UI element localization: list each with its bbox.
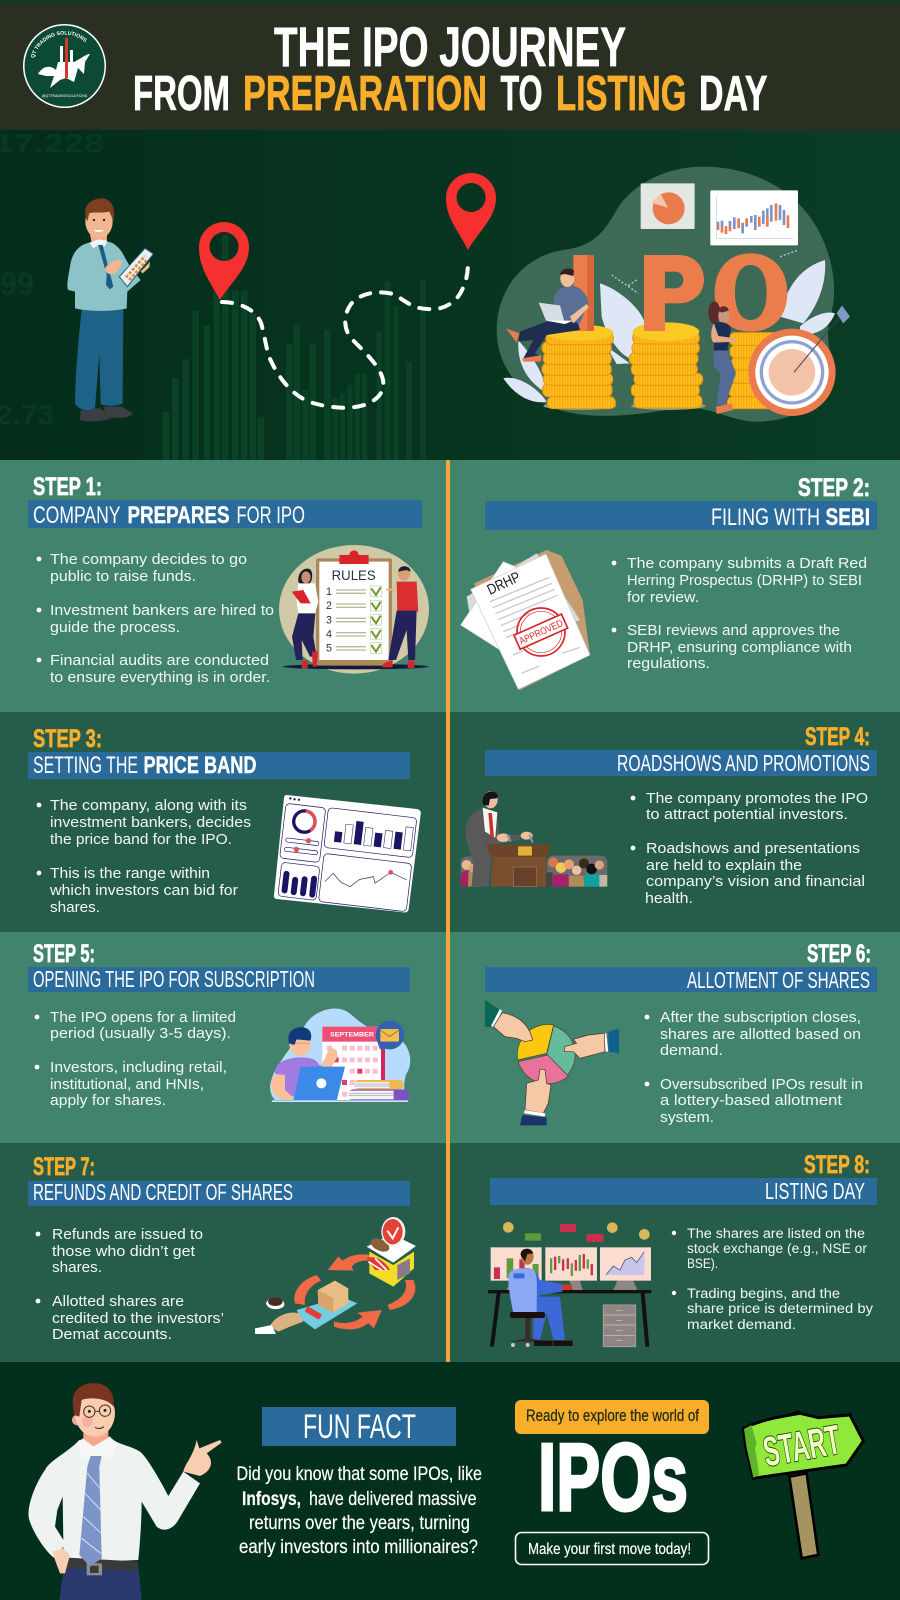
bullet list: company’s vision and financial: [646, 874, 865, 890]
fun fact text: Did you know that some IPOs, like: [236, 1463, 482, 1485]
books: [348, 1080, 409, 1101]
bullet list: demand.: [660, 1043, 723, 1059]
bullet list: [631, 791, 868, 907]
woman: [298, 569, 312, 585]
heading bar: PRICE BAND: [144, 752, 256, 779]
faint background numbers: 99: [0, 266, 34, 302]
icon: hands holding pie chart: [485, 1000, 619, 1125]
bullet list: DRHP, ensuring compliance with: [627, 640, 852, 656]
icon: location pin 2: [446, 173, 496, 250]
person standing: [708, 301, 737, 414]
bullet list: for review.: [627, 590, 699, 606]
illustration: IPO coins and target: [497, 167, 850, 422]
bullet list: market demand.: [687, 1317, 796, 1332]
panel: step 3: [0, 712, 448, 932]
heading bar: FOR IPO: [236, 502, 305, 529]
person with laptop: [506, 269, 589, 362]
icon: rules clipboard: 1: [326, 586, 332, 598]
bullet list: Roadshows and presentations: [646, 841, 860, 857]
bullet list: The company decides to go: [50, 552, 247, 568]
bullet list: apply for shares.: [50, 1093, 166, 1109]
leaves: [503, 260, 835, 402]
bullet list: institutional, and HNIs,: [50, 1077, 204, 1093]
bullet list: Refunds are issued to: [52, 1227, 203, 1243]
bullet list: regulations.: [627, 656, 710, 672]
icon: rules clipboard: 3: [326, 614, 332, 626]
heading bar: PREPARES: [128, 502, 230, 529]
icon: rules clipboard: [279, 545, 429, 674]
title: FROM: [133, 67, 230, 121]
bullet list: This is the range within: [50, 866, 210, 882]
heading bar: [490, 1178, 877, 1205]
bullet list: guide the process.: [50, 620, 180, 636]
illustration: man pointing: [29, 1383, 222, 1600]
bullet list: After the subscription closes,: [660, 1010, 861, 1026]
callout: first move: [516, 1532, 708, 1564]
man: [398, 566, 410, 581]
panel: step 7: [0, 1143, 448, 1362]
fun fact text: returns over the years, turning: [249, 1512, 470, 1534]
heading bar: COMPANY: [33, 502, 120, 529]
bullet list: Investment bankers are hired to: [50, 603, 274, 619]
callout: first move: Make your first move today!: [528, 1541, 691, 1558]
bullet list: shares are allotted based on: [660, 1027, 861, 1043]
step label: STEP 3:: [33, 725, 102, 753]
hero illustration panel: [0, 128, 900, 463]
icon: speaker at podium with audience: [461, 791, 607, 887]
step label: STEP 7:: [33, 1153, 95, 1181]
panel: step 6: [448, 932, 900, 1143]
title: PREPARATION: [243, 67, 487, 121]
heading bar: [485, 967, 877, 993]
callout: ready to explore: Ready to explore the world of: [526, 1407, 699, 1425]
bullet list: health.: [645, 891, 693, 907]
heading bar: REFUNDS AND CREDIT OF SHARES: [33, 1179, 293, 1205]
bullet list: BSE).: [687, 1256, 718, 1271]
podium: [491, 857, 546, 887]
bullet list: [672, 1226, 873, 1332]
heading bar: [485, 501, 877, 531]
laptop: [293, 1067, 345, 1101]
logo: QT TRADING SOLUTIONS: [30, 31, 87, 58]
bullet list: period (usually 3-5 days).: [50, 1026, 231, 1042]
heading bar: OPENING THE IPO FOR SUBSCRIPTION: [33, 966, 315, 992]
bullet list: [36, 1227, 224, 1343]
bullet list: The company, along with its: [50, 798, 247, 814]
bullet list: Financial audits are conducted: [50, 653, 269, 669]
bullet list: The IPO opens for a limited: [50, 1010, 236, 1026]
big IPOs text: IPOs: [538, 1424, 688, 1531]
orange centre divider: [446, 460, 450, 1362]
icon: start signpost: START: [760, 1416, 844, 1475]
icon: dashboard charts: [274, 795, 421, 912]
step label: STEP 5:: [33, 940, 95, 968]
backdrop blob: [497, 167, 834, 422]
bullet list: Herring Prospectus (DRHP) to SEBI: [627, 573, 862, 589]
icon: rules clipboard: 4: [326, 629, 332, 641]
title: DAY: [699, 67, 768, 121]
bullet list: The shares are listed on the: [687, 1226, 865, 1241]
background chart bars: [163, 235, 426, 463]
bullet list: to attract potential investors.: [646, 807, 848, 823]
bullet list: Oversubscribed IPOs result in: [660, 1077, 863, 1093]
fun fact heading: FUN FACT: [303, 1408, 416, 1446]
icon: person with laptop and calendar: SEPTEMBER: [330, 1032, 374, 1039]
trader: [517, 1268, 565, 1340]
bullet list: a lottery-based allotment: [660, 1093, 842, 1109]
heading bar: SETTING THE: [33, 752, 138, 779]
bullet list: those who didn’t get: [52, 1244, 195, 1260]
bullet list: investment bankers, decides: [50, 815, 251, 831]
icon: DRHP approved document: DRHP: [485, 569, 523, 599]
bullet list: are held to explain the: [646, 858, 802, 874]
bullet list: shares.: [52, 1260, 102, 1276]
step label: STEP 6:: [807, 940, 871, 968]
heading bar: [485, 750, 877, 776]
panel: step 1: [0, 460, 448, 712]
bullet list: system.: [660, 1110, 714, 1126]
speaker: [466, 809, 521, 887]
bullet list: the price band for the IPO.: [50, 832, 232, 848]
bullet list: share price is determined by: [687, 1301, 873, 1316]
step label: STEP 1:: [33, 473, 102, 501]
step label: STEP 2:: [798, 474, 870, 502]
candlestick chart card: [710, 190, 798, 245]
bullet list: Investors, including retail,: [50, 1060, 227, 1076]
title: LISTING: [556, 67, 686, 121]
illustration: man with clipboard: [67, 198, 153, 421]
bullet list: shares.: [50, 900, 100, 916]
sprigs: [612, 250, 798, 293]
bullet list: [37, 798, 251, 916]
icon: refund cycle with shop and parcel: [255, 1217, 416, 1334]
bullet list: The company promotes the IPO: [646, 791, 868, 807]
pie chart card: [641, 183, 695, 229]
bullet list: SEBI reviews and approves the: [627, 623, 840, 639]
heading bar: FILING WITH: [711, 504, 820, 531]
mail badge: [376, 1021, 404, 1049]
panel: step 2: [448, 460, 900, 712]
icon: start signpost: [743, 1411, 863, 1558]
step label: STEP 8:: [804, 1151, 870, 1179]
bullet list: credited to the investors’: [52, 1311, 224, 1327]
audience: [461, 856, 607, 887]
heading bar: SEBI: [826, 504, 870, 531]
header bar: [0, 0, 900, 130]
target with arrow: [748, 305, 850, 416]
bullet list: to ensure everything is in order.: [50, 670, 270, 686]
bullet list: Allotted shares are: [52, 1294, 184, 1310]
icon: rules clipboard: 2: [326, 600, 332, 612]
title: [133, 15, 768, 121]
icon: DRHP approved document: [461, 550, 590, 690]
bullet list: [645, 1010, 863, 1126]
icon: location pin 1: [199, 222, 249, 300]
letters IPO: [573, 253, 787, 332]
icon: DRHP approved document: APPROVED: [518, 618, 565, 647]
logo: @QTTRADINGSOLUTIONS: [42, 94, 88, 98]
dashed journey path: [222, 258, 468, 408]
bullet list: [37, 552, 274, 686]
callout: ready to explore: [515, 1400, 709, 1434]
panel: footer: [0, 1362, 900, 1600]
title: TO: [500, 67, 542, 121]
step label: STEP 4:: [805, 723, 870, 751]
heading bar: [28, 500, 422, 529]
bullet list: stock exchange (e.g., NSE or: [687, 1241, 868, 1256]
bullet list: which investors can bid for: [49, 883, 238, 899]
heading bar: [28, 752, 410, 779]
bullet list: [612, 556, 867, 672]
panel: step 4: [448, 712, 900, 932]
faint background numbers: [0, 128, 104, 430]
coin stacks: [542, 332, 780, 410]
bullet list: Demat accounts.: [52, 1327, 172, 1343]
fun fact text: have delivered massive: [309, 1488, 476, 1510]
person: [275, 1057, 325, 1100]
logo: [23, 24, 106, 108]
icon: rules clipboard: 5: [326, 643, 332, 655]
bullet list: Trading begins, and the: [687, 1286, 840, 1301]
icon: rules clipboard: RULES: [332, 567, 376, 583]
fun fact text: Infosys,: [242, 1488, 301, 1510]
icon: person with laptop and calendar: [270, 1008, 410, 1102]
bullet list: The company submits a Draft Red: [627, 556, 867, 572]
icon: trader at desk with monitors: [488, 1222, 651, 1347]
title: THE IPO JOURNEY: [274, 15, 626, 78]
bullet list: public to raise funds.: [50, 569, 196, 585]
fun fact text: early investors into millionaires?: [239, 1536, 478, 1558]
shop: [369, 1252, 414, 1287]
bullet list: [35, 1010, 236, 1109]
panel: step 8: [448, 1143, 900, 1362]
panel: step 5: [0, 932, 448, 1143]
fun fact text: [236, 1463, 482, 1558]
